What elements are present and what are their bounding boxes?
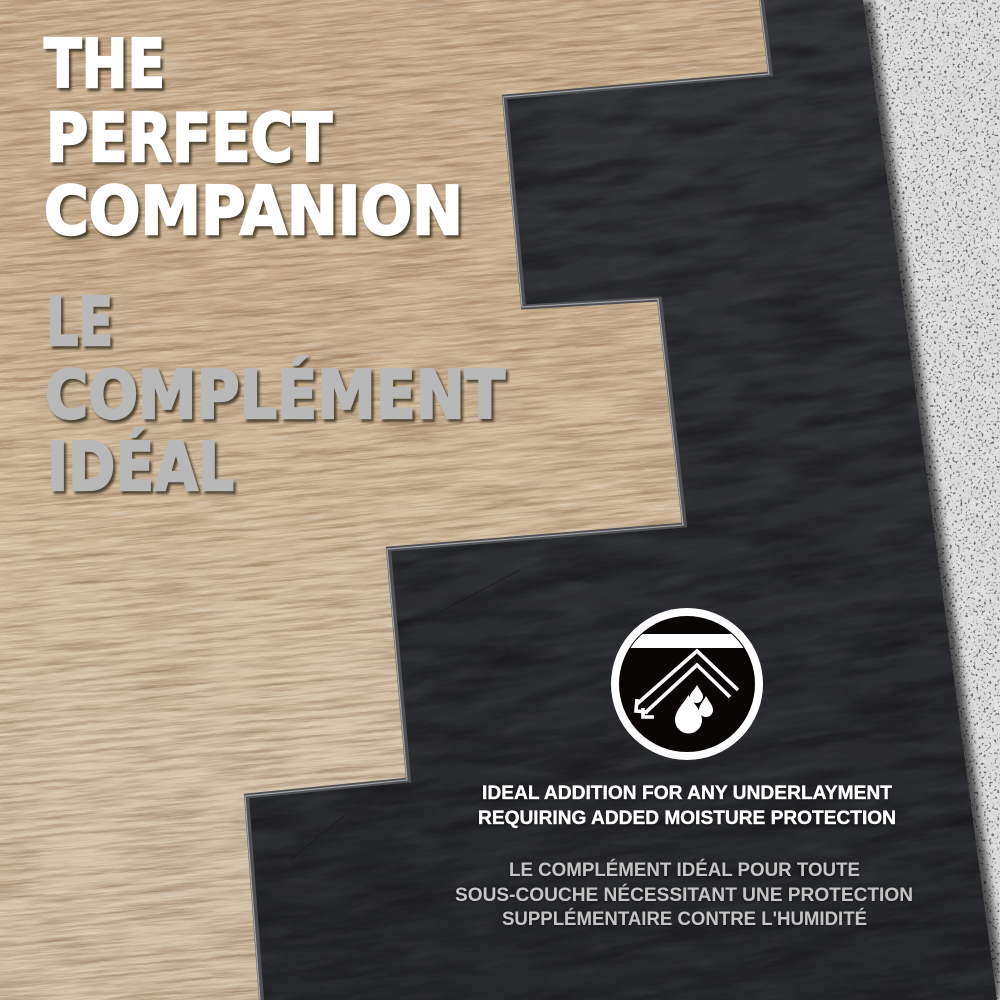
title: english: PERFECT [46,99,332,177]
title: english: COMPANION [44,172,463,250]
french description: SOUS-COUCHE NÉCESSITANT UNE PROTECTION [455,884,913,906]
dark underlayment sheet [240,0,1000,1000]
french description [455,859,913,930]
wood vinyl planks [0,0,768,1000]
title: english [44,25,463,250]
icon: water drops [675,685,713,734]
english description: REQUIRING ADDED MOISTURE PROTECTION [478,808,896,829]
icon: floor bar [630,634,744,648]
title: english: THE [44,25,165,103]
icon: deflected moisture arrows [636,651,738,717]
crease lines [290,570,520,860]
icon: moisture barrier badge [610,612,764,756]
french description: LE COMPLÉMENT IDÉAL POUR TOUTE [509,859,860,881]
concrete subfloor [840,0,1000,1000]
title: french [45,283,505,506]
title: french: IDÉAL [47,427,234,506]
english description: IDEAL ADDITION FOR ANY UNDERLAYMENT [482,783,892,804]
title: french: COMPLÉMENT [45,355,505,434]
underlayment shadow on concrete [850,0,1000,1000]
english description [478,783,896,829]
french description: SUPPLÉMENTAIRE CONTRE L'HUMIDITÉ [502,908,867,930]
plank bevel edge [246,0,770,1000]
title: french: LE [46,283,113,361]
